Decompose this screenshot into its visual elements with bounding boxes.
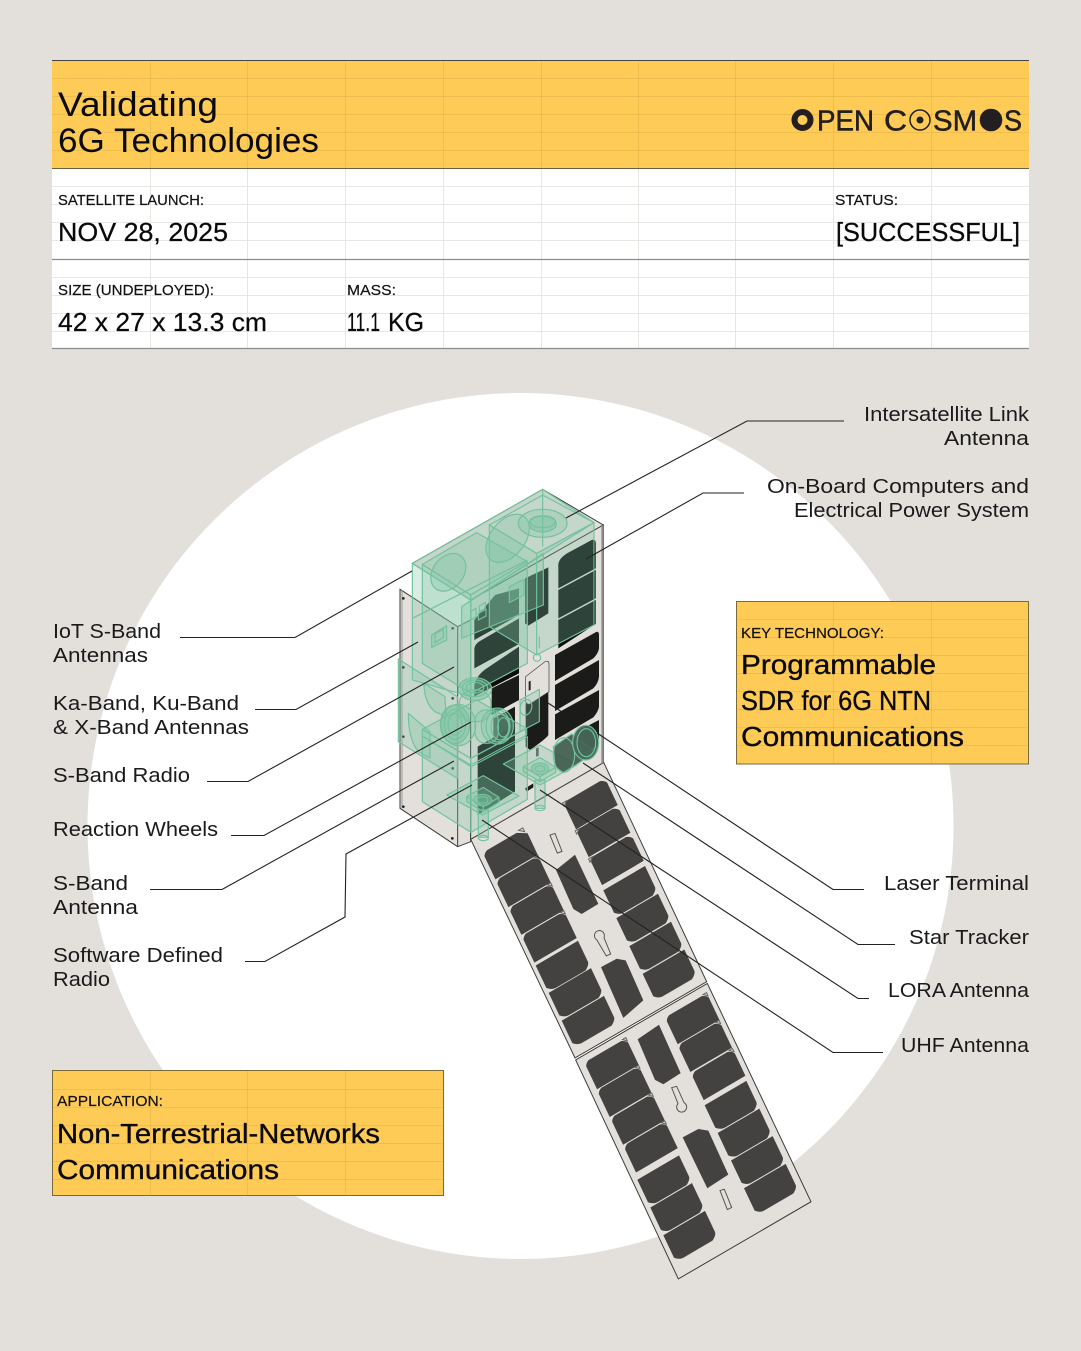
panel: application: Communications bbox=[57, 1154, 279, 1185]
labels: left side: S-Band bbox=[53, 873, 128, 895]
launch date block bbox=[58, 192, 228, 247]
leader lines bbox=[150, 421, 895, 1052]
header table bbox=[52, 60, 1029, 349]
S-band and UHF antenna patches bbox=[467, 758, 556, 841]
logo: Open Cosmos: C bbox=[884, 106, 907, 138]
deployed solar panels bbox=[470, 762, 811, 1279]
labels: left side: Ka-Band, Ku-Band bbox=[53, 693, 239, 715]
panel: application bbox=[52, 1070, 444, 1196]
mass block: KG bbox=[388, 307, 424, 337]
green translucent payload modules bbox=[398, 489, 594, 832]
panel: key technology: Communications bbox=[741, 721, 964, 752]
panel: key technology: SDR for 6G NTN bbox=[741, 685, 931, 716]
title bbox=[58, 86, 319, 160]
mass block bbox=[347, 282, 424, 337]
panel: application: Non-Terrestrial-Networks bbox=[57, 1118, 380, 1149]
labels: right side: Laser Terminal bbox=[884, 873, 1029, 895]
labels: right side: Antenna bbox=[944, 428, 1030, 450]
labels: left side: Reaction Wheels bbox=[53, 819, 218, 841]
laser terminal bbox=[553, 725, 599, 773]
labels: right side: LORA Antenna bbox=[888, 980, 1030, 1002]
main structure with solar cells bbox=[412, 489, 603, 839]
size block: 42 x 27 x 13.3 cm bbox=[58, 307, 267, 337]
panel: key technology: KEY TECHNOLOGY: bbox=[741, 625, 884, 642]
labels: left side: Antennas bbox=[53, 645, 148, 667]
status block bbox=[835, 192, 1020, 247]
logo: Open Cosmos bbox=[794, 106, 1022, 138]
panel: key technology bbox=[736, 602, 1028, 764]
panel: application: APPLICATION: bbox=[57, 1093, 163, 1110]
labels: left side: Antenna bbox=[53, 897, 139, 919]
satellite body bbox=[398, 489, 603, 847]
logo: Open Cosmos: SM bbox=[933, 106, 977, 138]
rear plate bbox=[400, 589, 471, 847]
labels: right side: On-Board Computers and bbox=[767, 476, 1029, 498]
labels: left side bbox=[53, 621, 249, 991]
labels: right side: Intersatellite Link bbox=[864, 404, 1030, 426]
labels: right side: UHF Antenna bbox=[901, 1035, 1030, 1057]
title: 6G Technologies bbox=[58, 122, 319, 160]
labels: left side: Software Defined bbox=[53, 945, 223, 967]
labels: right side: Star Tracker bbox=[909, 927, 1029, 949]
title: Validating bbox=[58, 86, 218, 124]
labels: left side: & X-Band Antennas bbox=[53, 717, 249, 739]
mass block: 11.1 bbox=[347, 307, 380, 337]
labels: left side: IoT S-Band bbox=[53, 621, 161, 643]
logo: Open Cosmos: PEN bbox=[817, 106, 874, 138]
launch date block: SATELLITE LAUNCH: bbox=[58, 192, 204, 209]
labels: right side bbox=[767, 404, 1030, 1057]
mass block: MASS: bbox=[347, 282, 396, 299]
labels: left side: Radio bbox=[53, 969, 110, 991]
reaction wheels bbox=[440, 678, 513, 746]
labels: right side: Electrical Power System bbox=[794, 500, 1029, 522]
labels: left side: S-Band Radio bbox=[53, 765, 190, 787]
size block bbox=[58, 282, 267, 337]
launch date block: NOV 28, 2025 bbox=[58, 217, 228, 247]
status block: [SUCCESSFUL] bbox=[836, 217, 1020, 247]
logo: Open Cosmos: S bbox=[1004, 106, 1022, 138]
status block: STATUS: bbox=[835, 192, 898, 209]
panel: key technology: Programmable bbox=[741, 649, 936, 680]
background circle bbox=[88, 393, 954, 1259]
size block: SIZE (UNDEPLOYED): bbox=[58, 282, 214, 299]
